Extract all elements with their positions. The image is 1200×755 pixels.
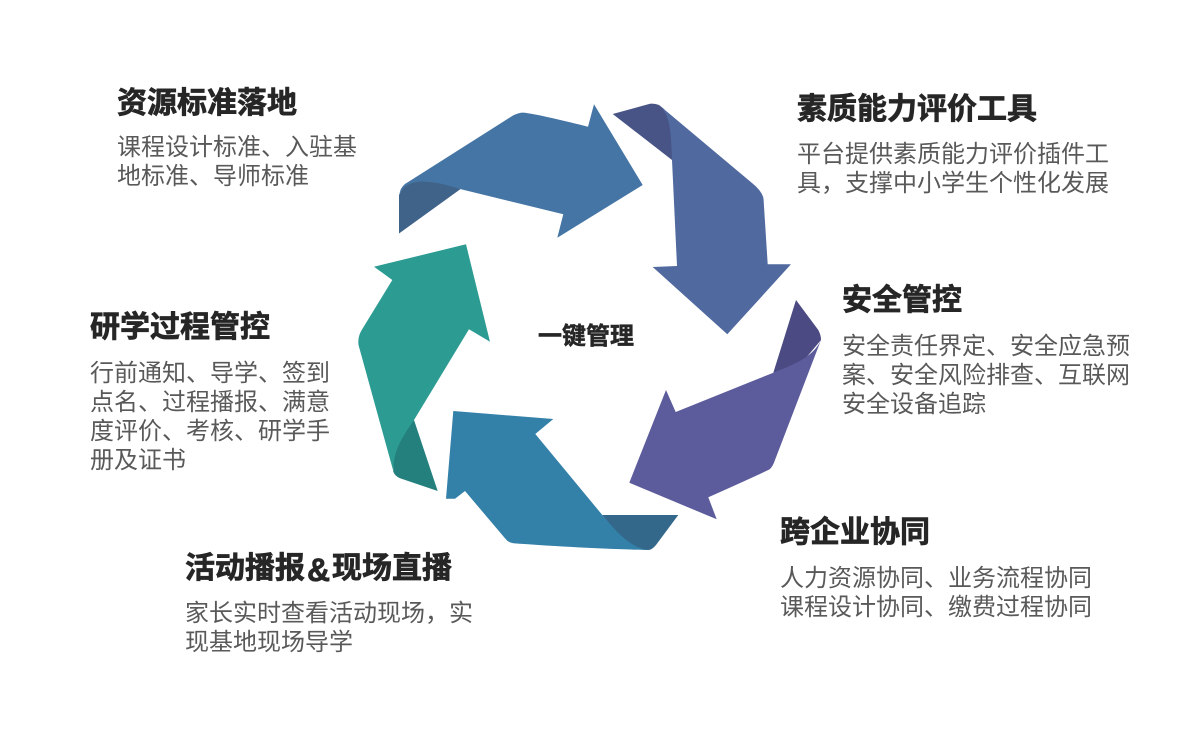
text block: 课程设计协同、缴费过程协同	[780, 594, 1092, 621]
text block: 地标准、导师标准	[117, 163, 309, 190]
heading: 研学过程管控	[90, 311, 270, 344]
heading: 素质能力评价工具	[797, 93, 1037, 126]
text block	[797, 141, 1109, 197]
text block	[780, 565, 1092, 621]
text block	[90, 360, 330, 474]
arrow: top blue	[399, 104, 643, 238]
arrow: left green	[358, 244, 490, 491]
panel: 研学过程管控	[90, 310, 330, 474]
heading: 活动播报 现场直播	[185, 552, 452, 585]
text block: 点名、过程播报、满意	[90, 389, 330, 416]
text block: 安全责任界定、安全应急预	[842, 333, 1130, 360]
text block: 家长实时查看活动现场，实	[185, 600, 473, 627]
text block	[117, 134, 357, 190]
arrow: bottom teal blue	[446, 411, 678, 550]
heading: &	[307, 552, 330, 588]
arrow: right indigo	[613, 104, 791, 334]
text block: 度评价、考核、研学手	[90, 418, 330, 445]
panel: 活动播报&现场直播	[185, 552, 473, 656]
panel: 跨企业协同	[780, 516, 1092, 621]
text block: 行前通知、导学、签到	[90, 360, 330, 387]
text block: 平台提供素质能力评价插件工	[797, 141, 1109, 168]
heading: 资源标准落地	[117, 87, 297, 120]
text block: 册及证书	[90, 447, 186, 474]
text block: 案、安全风险排查、互联网	[842, 362, 1130, 389]
text block: 现基地现场导学	[185, 629, 353, 656]
panel: 资源标准落地	[117, 86, 357, 190]
text block: 课程设计标准、入驻基	[117, 134, 357, 161]
text block: 具，支撑中小学生个性化发展	[797, 170, 1109, 197]
heading: 跨企业协同	[780, 516, 930, 549]
arrow: lower right purple	[629, 300, 821, 519]
text block	[842, 333, 1130, 418]
heading: 安全管控	[842, 284, 962, 317]
text block	[185, 600, 473, 656]
text block: 安全设备追踪	[842, 391, 986, 418]
panel: 素质能力评价工具	[797, 92, 1109, 197]
center label: 一键管理	[538, 323, 634, 350]
text block: 人力资源协同、业务流程协同	[780, 565, 1092, 592]
panel: 安全管控	[842, 284, 1130, 418]
